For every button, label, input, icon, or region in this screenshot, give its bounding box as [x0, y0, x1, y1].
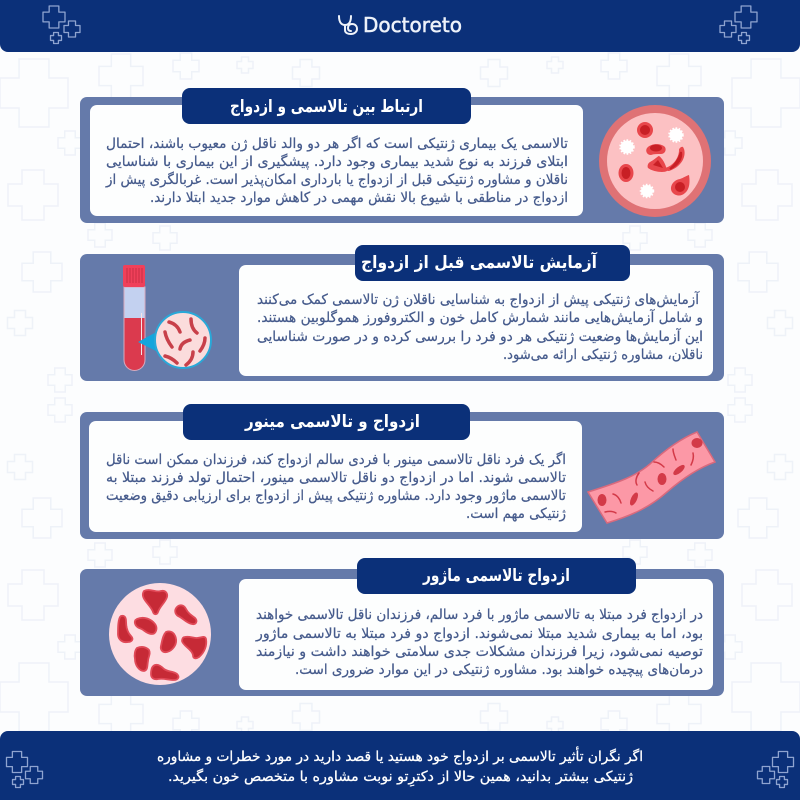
body text: ژنتیکی مهم است. [466, 506, 566, 522]
body text [257, 291, 703, 363]
body text [255, 607, 703, 678]
icon: header crosses left [43, 6, 80, 44]
body text: تالاسمی ماژور وجود دارد. مشاوره ژنتیکی پیش از ازدواج برای ارزیابی دقیق وضعیت [106, 488, 566, 504]
text box [90, 105, 583, 216]
panel: thalassemia and marriage link [80, 88, 724, 223]
text box [239, 579, 713, 690]
body text: ناقلان، مشاوره ژنتیکی ارائه می‌شود. [503, 347, 703, 363]
footer call to action [157, 746, 643, 786]
panel: premarital test [80, 245, 724, 381]
body text: و شامل آزمایش‌هایی مانند شمارش کامل خون و الکتروفورز هموگلوبین هستند. [257, 309, 703, 326]
logo: Doctoreto: Doctoreto [363, 13, 462, 37]
footer bar [0, 731, 800, 800]
icon: header crosses right [720, 6, 757, 44]
icon: test tube with blood cells [123, 265, 211, 370]
body text: در ازدواج فرد مبتلا به تالاسمی ماژور با فرد سالم، فرزندان ناقل تالاسمی خواهند [256, 607, 703, 623]
body text: درمان‌های پیچیده خواهند بود. مشاوره ژنتیکی در این موارد ضروری است. [295, 662, 703, 678]
body text: ناقلان و مشاوره ژنتیکی قبل از ازدواج یا بارداری امکان‌پذیر است. غربالگری پیش از [105, 171, 568, 188]
icon: footer crosses right [758, 752, 794, 788]
heading bar [182, 88, 471, 124]
text box [89, 421, 582, 532]
body text: بود، اما به بیماری شدید مبتلا نمی‌شوند. ازدواج دو فرد مبتلا به تالاسمی ماژور [255, 626, 703, 642]
text box [239, 265, 713, 376]
heading bar [355, 245, 630, 281]
body text: آزمایش‌های ژنتیکی پیش از ازدواج به شناسایی ناقلان ژن تالاسمی کمک می‌کنند [257, 291, 700, 308]
body text: تالاسمی یک بیماری ژنتیکی است که اگر هر دو والد ناقل ژن معیوب باشند، احتمال [106, 135, 568, 152]
heading bar [183, 404, 470, 440]
body text [105, 135, 568, 206]
body text: توصیه نمی‌شود، زیرا فرزندان مشکلات جدی سلامتی خواهند داشت و نیازمند [256, 644, 703, 660]
body text: این آزمایش‌ها وضعیت ژنتیکی هر دو فرد را بررسی کرده و در صورت شناسایی [257, 328, 703, 345]
heading: آزمایش تالاسمی قبل از ازدواج [361, 251, 598, 273]
icon: blood vessel [588, 432, 715, 523]
panel: thalassemia major marriage [80, 558, 724, 696]
heading: ازدواج تالاسمی ماژور [422, 566, 570, 586]
body text: ابتلای فرزند به نوع شدید بیماری وجود دارد. پیشگیری از این بیماری با شناسایی [106, 153, 568, 170]
header bar [0, 0, 800, 52]
heading bar [357, 558, 636, 594]
icon: blood smear circle [599, 105, 711, 217]
icon: abnormal red cells circle [109, 583, 211, 685]
panel: marriage and thalassemia minor [80, 404, 724, 539]
body text: تالاسمی شوند. اما در ازدواج دو ناقل تالاسمی مینور، احتمال تولد فرزند مبتلا به [106, 470, 566, 486]
body text: اگر یک فرد ناقل تالاسمی مینور با فردی سالم ازدواج کند، فرزندان ممکن است ناقل [106, 451, 566, 468]
footer call to action: اگر نگران تأثیر تالاسمی بر ازدواج خود هستید یا قصد دارید در مورد خطرات و مشاوره [157, 746, 643, 765]
heading: ازدواج و تالاسمی مینور [244, 412, 420, 432]
body text [106, 451, 566, 522]
heading: ارتباط بین تالاسمی و ازدواج [230, 97, 423, 117]
body text: ازدواج در مناطقی با شیوع بالا نقش مهمی در کاهش موارد جدید ابتلا دارند. [150, 190, 568, 206]
icon: footer crosses left [6, 752, 42, 788]
footer call to action: ژنتیکی بیشتر بدانید، همین حالا از دکترِتو نوبت مشاوره با متخصص خون بگیرید. [168, 768, 633, 786]
